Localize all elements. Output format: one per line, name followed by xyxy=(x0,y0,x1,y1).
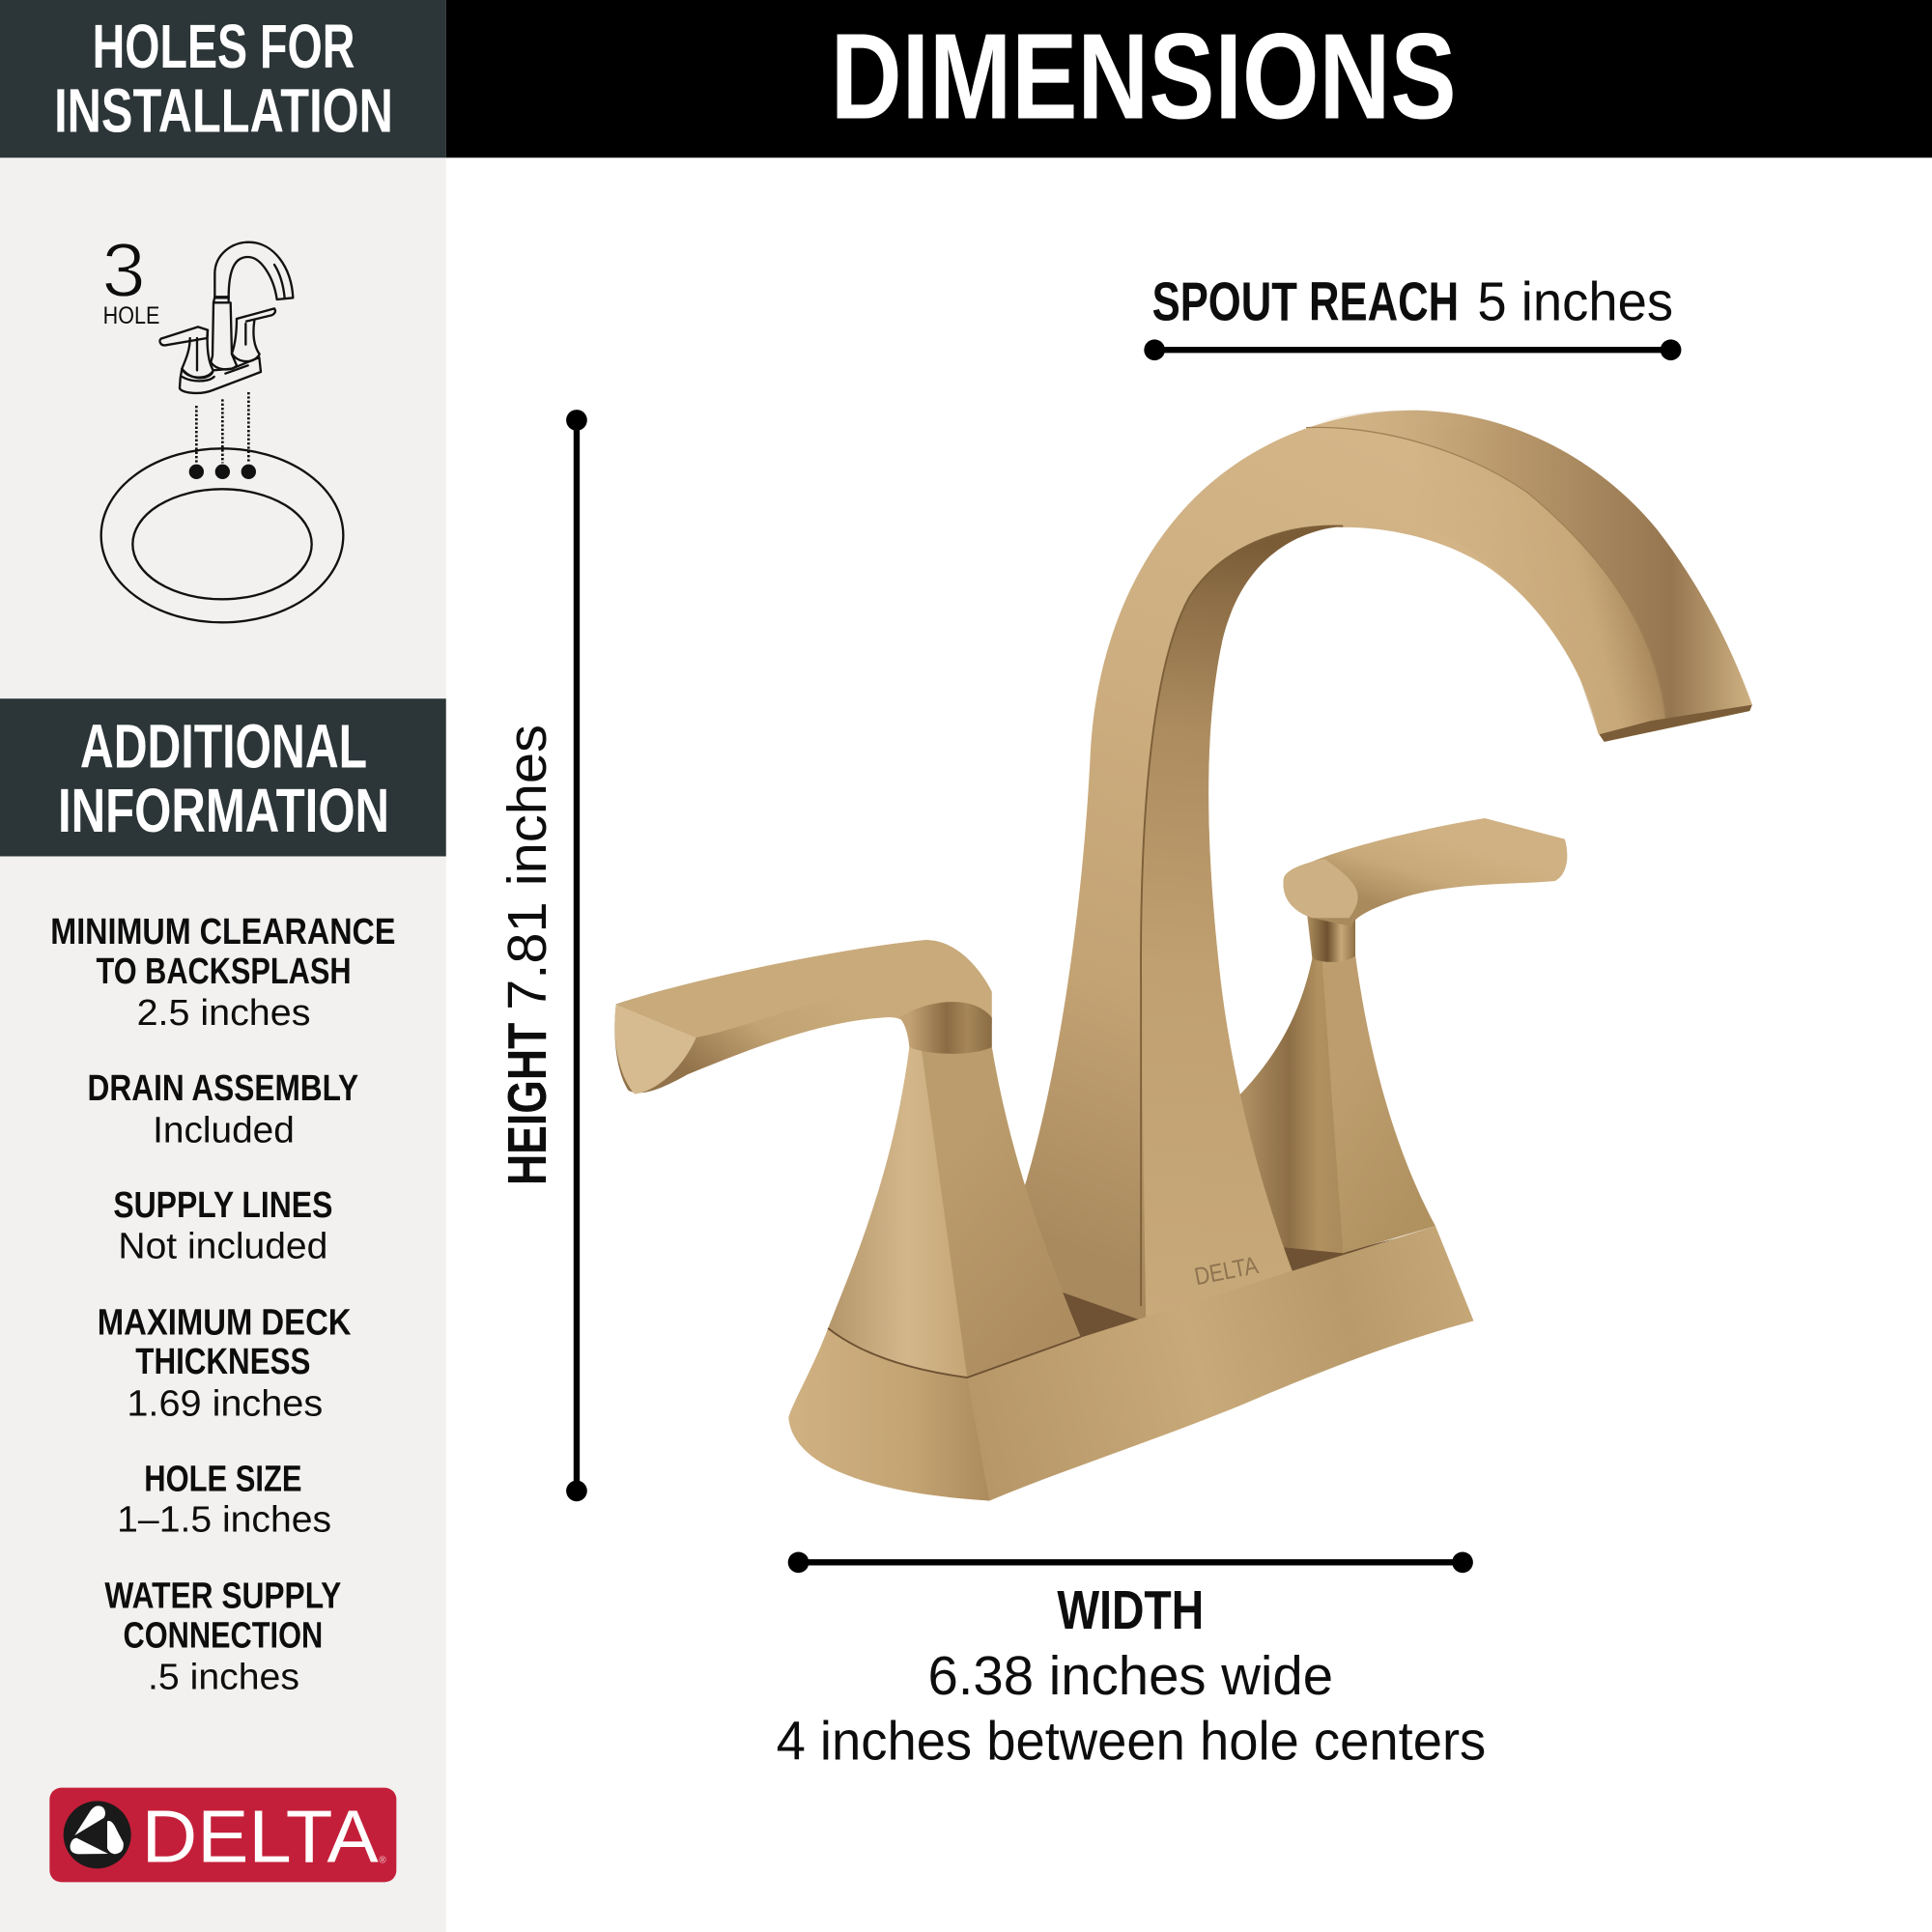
faucet brand mark: DELTA xyxy=(1192,1252,1261,1291)
dimension: width: 6.38 inches wide xyxy=(927,1645,1333,1706)
spec: minimum clearance: 2.5 inches xyxy=(137,992,310,1034)
icon: three hole faucet and sink diagram xyxy=(101,228,343,622)
right stem xyxy=(1306,906,1355,962)
left handle base xyxy=(828,1047,1081,1378)
dimension: width: 4 inches between hole centers xyxy=(777,1710,1486,1771)
dimension: width: WIDTH xyxy=(1057,1579,1204,1640)
logo: delta: DELTA xyxy=(142,1796,379,1879)
faucet illustration xyxy=(614,411,1752,1501)
spec: hole size: HOLE SIZE xyxy=(144,1458,301,1499)
dimension: spout reach xyxy=(1144,271,1681,360)
spec: water supply connection: CONNECTION xyxy=(124,1614,323,1656)
mounting holes xyxy=(189,465,256,479)
spec: drain assembly: DRAIN ASSEMBLY xyxy=(88,1067,358,1109)
header: additional information xyxy=(0,698,446,856)
spec: minimum clearance: MINIMUM CLEARANCE xyxy=(50,911,395,952)
label: 3 hole: 3 xyxy=(101,228,146,313)
dimension: height: HEIGHT xyxy=(497,1023,557,1185)
dotted alignment lines xyxy=(196,392,248,463)
spec: water supply connection xyxy=(104,1576,341,1698)
right handle xyxy=(1284,818,1567,926)
logo: delta: ® xyxy=(379,1856,386,1866)
label: 3 hole: HOLE xyxy=(103,303,159,329)
left foot xyxy=(788,1328,989,1501)
label: 3 hole xyxy=(101,228,159,329)
spec: water supply connection: .5 inches xyxy=(148,1657,299,1698)
right handle base xyxy=(1233,955,1435,1253)
dimension: spout reach: 5 inches xyxy=(1477,271,1673,332)
title: dimensions: DIMENSIONS xyxy=(831,8,1457,144)
deck gap shadow xyxy=(1047,1229,1435,1346)
left handle xyxy=(614,940,992,1094)
header: holes for installation: HOLES FOR xyxy=(93,12,355,81)
spec: drain assembly xyxy=(88,1067,358,1151)
spec: supply lines: SUPPLY LINES xyxy=(113,1184,332,1226)
spec: hole size xyxy=(117,1458,331,1540)
spec: maximum deck thickness: 1.69 inches xyxy=(127,1383,323,1425)
spec: drain assembly: Included xyxy=(153,1109,295,1151)
spout xyxy=(1010,411,1752,1322)
spec: water supply connection: WATER SUPPLY xyxy=(104,1576,341,1617)
spec: maximum deck thickness xyxy=(98,1301,352,1425)
left stem xyxy=(899,1002,992,1054)
logo: delta xyxy=(49,1788,396,1882)
dimension: height xyxy=(497,410,587,1501)
spec: minimum clearance: TO BACKSPLASH xyxy=(96,951,352,992)
panel: left sidebar xyxy=(0,0,446,1932)
spec: maximum deck thickness: THICKNESS xyxy=(135,1341,310,1382)
header: additional information: ADDITIONAL xyxy=(80,712,367,781)
header: additional information: INFORMATION xyxy=(58,776,389,845)
sink outline xyxy=(101,448,343,622)
spec: supply lines xyxy=(113,1184,332,1266)
dimension: height: 7.81 inches xyxy=(497,724,557,1010)
deck plate xyxy=(961,1226,1474,1501)
faucet line drawing xyxy=(159,242,293,393)
dimension: width xyxy=(777,1552,1486,1771)
header: holes for installation xyxy=(0,0,446,157)
spec: maximum deck thickness: MAXIMUM DECK xyxy=(98,1301,352,1343)
title: dimensions xyxy=(446,0,1932,157)
dimension: spout reach: SPOUT REACH xyxy=(1152,271,1459,332)
spec: minimum clearance xyxy=(50,911,395,1034)
spec: supply lines: Not included xyxy=(118,1225,327,1266)
spec: hole size: 1–1.5 inches xyxy=(117,1498,331,1540)
header: holes for installation: INSTALLATION xyxy=(54,75,393,145)
